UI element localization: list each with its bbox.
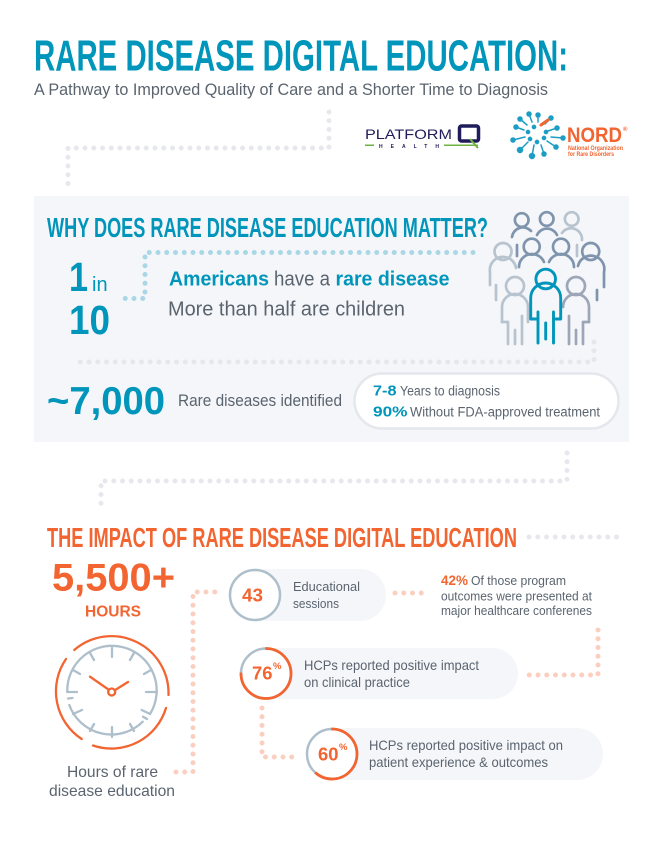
- stat pill: 76% clinical practice: on clinical practice: [304, 674, 410, 690]
- panel: why education matters: [34, 196, 629, 442]
- logo: NORD: [511, 112, 628, 158]
- text: Americans have a rare disease: Americans: [169, 268, 269, 290]
- stat: 5,500+: 5,500+: [52, 556, 175, 600]
- text: 42% program outcomes: outcomes were presented at: [441, 588, 592, 604]
- connector: hours to sessions: [176, 592, 220, 772]
- connector: header to panel: [68, 112, 329, 187]
- text: Americans have a rare disease: rare disease: [336, 268, 450, 290]
- stat pill: 43 educational sessions: 43: [242, 586, 263, 606]
- stat pill: 60% patient experience: patient experience & outcomes: [369, 754, 548, 770]
- text: more than half are children: More than half are children: [168, 298, 405, 320]
- stat pill: 76% clinical practice: %: [273, 661, 282, 672]
- logo: NORD: for Rare Disorders: [568, 152, 615, 158]
- stat pill: 60% patient experience: HCPs reported positive impact on: [369, 737, 563, 753]
- subtitle: A Pathway to Improved Quality of Care and a Shorter Time to Diagnosis: [34, 80, 548, 99]
- stat: 1 in 10: 1: [69, 254, 88, 300]
- callout: years to diagnosis: 90%: [373, 404, 408, 420]
- stat pill: 43 educational sessions: sessions: [293, 596, 339, 611]
- stat pill: 76% clinical practice: HCPs reported positive impact: [304, 657, 479, 673]
- connector: divider: [77, 342, 594, 362]
- stat: 1 in 10: [69, 254, 110, 343]
- callout: years to diagnosis: 7-8: [373, 382, 396, 400]
- callout: years to diagnosis: [354, 374, 618, 428]
- text: 42% program outcomes: major healthcare conferenes: [441, 603, 592, 618]
- callout: years to diagnosis: Years to diagnosis: [400, 384, 500, 398]
- connector: 1 in 10 to text: [119, 252, 473, 298]
- text: hours of rare disease education: Hours of rare: [67, 764, 158, 781]
- label: hours: HOURS: [85, 604, 141, 620]
- logo: Platform Q Health: [365, 126, 478, 150]
- text: Americans have a rare disease: have a: [274, 268, 331, 290]
- icon: group of people: [490, 212, 604, 344]
- logo: Platform Q Health: PLATFORM: [365, 126, 452, 142]
- connector: outcomes to clinical practice: [528, 630, 598, 675]
- text: 42% program outcomes: 42%: [441, 572, 469, 588]
- logo: NORD: ®: [623, 126, 628, 133]
- stat: 1 in 10: 10: [69, 297, 110, 343]
- stat pill: 43 educational sessions: Educational: [293, 579, 360, 594]
- icon: clock: [56, 636, 169, 749]
- connector: sessions to program outcomes: [395, 590, 429, 596]
- callout: years to diagnosis: Without FDA-approved treatment: [410, 404, 600, 420]
- text: hours of rare disease education: disease education: [49, 783, 175, 800]
- logo: Platform Q Health: HEALTH: [379, 144, 439, 150]
- stat: ~7,000: ~7,000: [47, 380, 165, 423]
- text: rare diseases identified: Rare diseases identified: [178, 391, 342, 410]
- stat pill: 60% patient experience: 60: [318, 744, 338, 764]
- connector: panel to impact section: [101, 453, 567, 509]
- stat pill: 60% patient experience: %: [339, 742, 348, 753]
- stat pill: 76% clinical practice: 76: [252, 664, 272, 684]
- stat pill: 60% patient experience: [307, 728, 603, 780]
- connector: clinical practice to patient experience: [262, 708, 297, 757]
- text: 42% program outcomes: [441, 572, 592, 618]
- text: 42% program outcomes: Of those program: [471, 573, 566, 588]
- stat pill: 76% clinical practice: [241, 648, 518, 699]
- stat: 1 in 10: in: [92, 274, 108, 296]
- text: hours of rare disease education: [49, 764, 175, 800]
- stat pill: 43 educational sessions: [230, 569, 386, 621]
- logo: NORD: NORD: [567, 124, 622, 147]
- text: Americans have a rare disease: [169, 268, 450, 290]
- connector: heading tail: [529, 534, 618, 540]
- logo: NORD: National Organization: [568, 146, 623, 152]
